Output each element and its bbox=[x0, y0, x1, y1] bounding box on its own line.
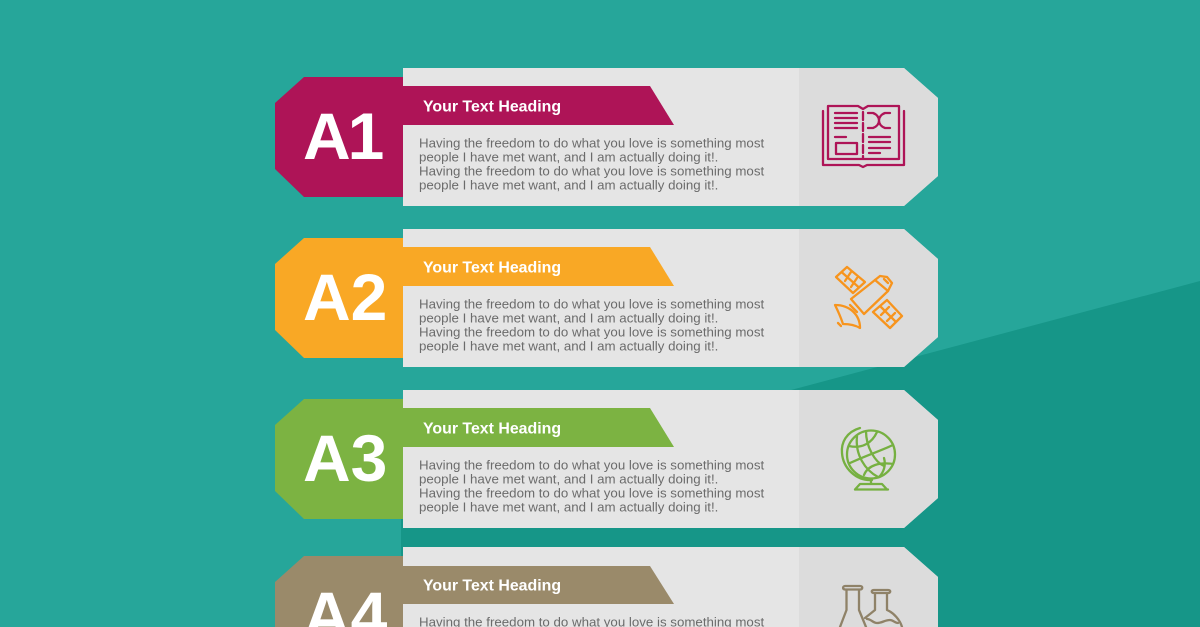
number tab A3 bbox=[275, 399, 404, 519]
number tab A2 bbox=[275, 238, 404, 358]
heading A3: Your Text Heading bbox=[423, 420, 561, 438]
card: A2 bbox=[275, 229, 938, 367]
icon panel A4 bbox=[799, 547, 938, 627]
number tab A4 bbox=[275, 556, 404, 627]
number tab A1 bbox=[275, 77, 404, 197]
body text A2: Having the freedom to do what you love is something most bbox=[419, 324, 764, 340]
icon: globe bbox=[842, 428, 895, 490]
card body A2 bbox=[403, 229, 938, 367]
heading A4: Your Text Heading bbox=[423, 578, 561, 594]
label A2: A2 bbox=[303, 260, 387, 334]
body text A3: people I have met want, and I am actually doing it!. bbox=[419, 500, 718, 514]
body text A2: Having the freedom to do what you love is something most bbox=[419, 296, 764, 312]
body text A3: Having the freedom to do what you love is something most bbox=[419, 458, 764, 472]
body text A1: Having the freedom to do what you love is something most bbox=[419, 136, 764, 150]
body text A2: people I have met want, and I am actually doing it!. bbox=[419, 310, 718, 326]
heading ribbon A4 bbox=[403, 566, 674, 604]
body text A3: people I have met want, and I am actually doing it!. bbox=[419, 472, 718, 486]
heading A2: Your Text Heading bbox=[423, 260, 561, 276]
card: A1 bbox=[275, 68, 938, 206]
heading A1: Your Text Heading bbox=[423, 98, 561, 116]
body text A1: people I have met want, and I am actually doing it!. bbox=[419, 178, 718, 192]
body text A1: Having the freedom to do what you love is something most bbox=[419, 164, 764, 178]
body text A1: people I have met want, and I am actually doing it!. bbox=[419, 150, 718, 164]
icon panel A1 bbox=[799, 68, 938, 206]
card body A3 bbox=[403, 390, 938, 528]
card body A4 bbox=[403, 547, 938, 627]
label A1: A1 bbox=[303, 99, 383, 173]
body text A3: Having the freedom to do what you love is something most bbox=[419, 486, 764, 500]
icon panel A2 bbox=[799, 229, 938, 367]
heading ribbon A1 bbox=[403, 86, 674, 125]
icon: open book bbox=[823, 106, 904, 167]
card: A4 bbox=[275, 547, 938, 627]
card: A3 bbox=[275, 390, 938, 528]
icon: flasks bbox=[840, 586, 902, 627]
body text A2: people I have met want, and I am actually doing it!. bbox=[419, 338, 718, 354]
icon panel A3 bbox=[799, 390, 938, 528]
icon: satellite bbox=[835, 267, 902, 328]
heading ribbon A3 bbox=[403, 408, 674, 447]
card body A1 bbox=[403, 68, 938, 206]
heading ribbon A2 bbox=[403, 247, 674, 286]
label A3: A3 bbox=[303, 421, 387, 495]
